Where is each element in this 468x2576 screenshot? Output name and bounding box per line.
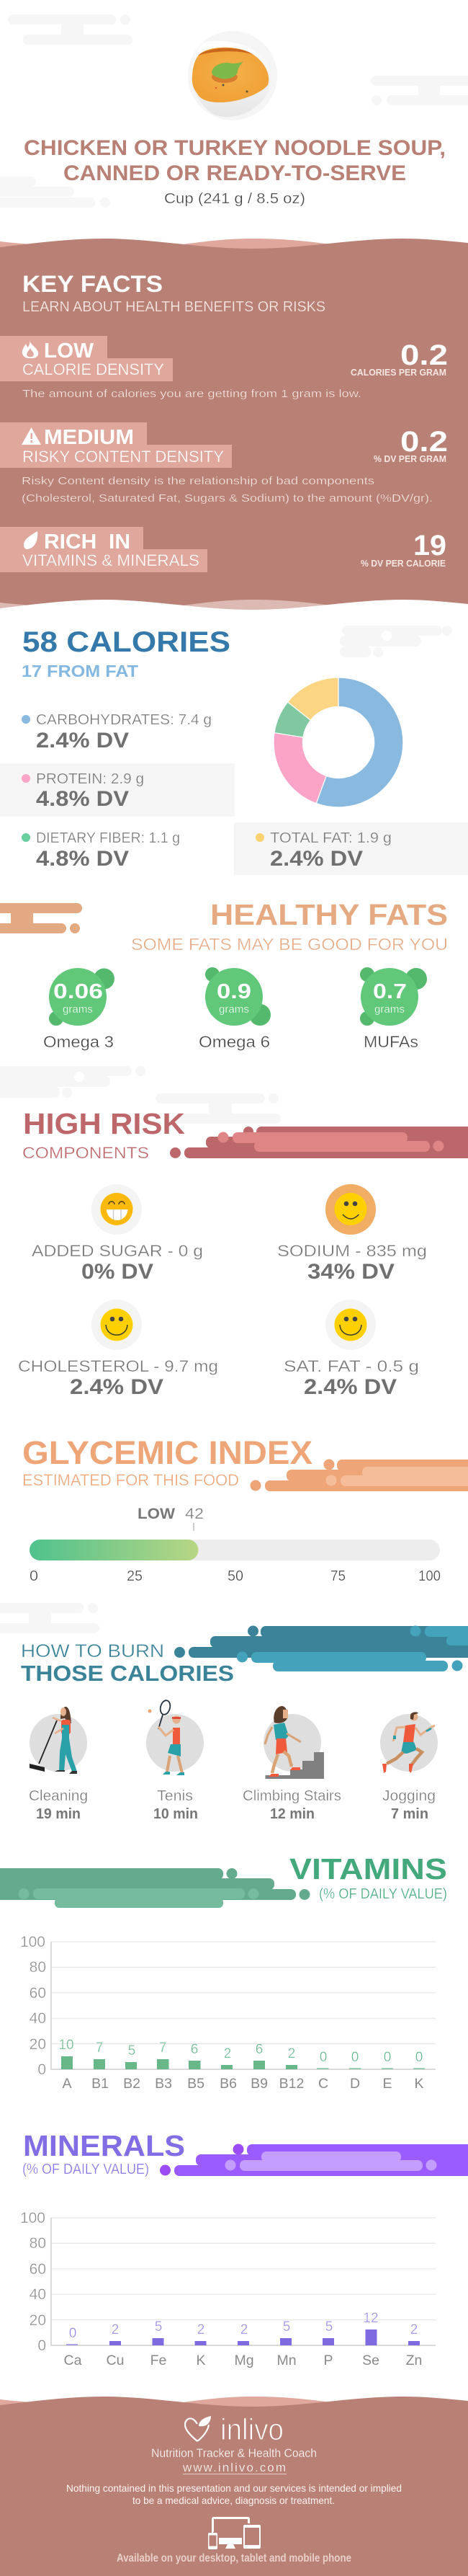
chart: minerals bars: Zn (406, 2353, 422, 2368)
heading: minerals: (% OF DAILY VALUE) (22, 2162, 149, 2177)
chart: glycemic index bar: LOW (138, 1506, 175, 1522)
fact: vitamins and minerals: RICH IN (44, 530, 130, 554)
heading: minerals (22, 2129, 185, 2177)
legend: carbohydrates: 2.4% DV (36, 729, 129, 752)
chart: vitamins bars: 0 (37, 2061, 46, 2078)
chart: minerals bars: Se (362, 2353, 379, 2368)
heading: key facts: LEARN ABOUT HEALTH BENEFITS OR RISKS (22, 299, 325, 315)
item: added sugar: ADDED SUGAR - 0 g (32, 1242, 203, 1260)
item: added sugar (32, 1184, 203, 1284)
heading: minerals: MINERALS (23, 2129, 185, 2162)
chart: vitamins bars: 7 (159, 2040, 166, 2056)
panel: footer (0, 2397, 468, 2576)
chart: vitamins bars: 0 (384, 2050, 391, 2065)
fact: risky content density (0, 422, 448, 505)
item: cholesterol: 2.4% DV (70, 1375, 163, 1399)
legend: protein (22, 771, 144, 811)
fact: vitamins and minerals: 19 (413, 530, 446, 561)
fact: risky content density: MEDIUM (44, 426, 134, 449)
heading: key facts (22, 271, 325, 315)
chart: vitamins bars: 5 (128, 2043, 135, 2058)
title: CHICKEN OR TURKEY NOODLE SOUP, (24, 136, 446, 160)
heading: how to burn: THOSE CALORIES (21, 1661, 234, 1686)
chart: minerals bars: 0 (37, 2337, 46, 2354)
heading: glycemic index (22, 1434, 312, 1489)
chart: vitamins bars: 20 (30, 2036, 46, 2053)
panel: key facts (0, 239, 468, 620)
chart: glycemic index bar: 75 (330, 1568, 346, 1584)
decoration: minerals cloud (160, 2144, 468, 2176)
chart: minerals bars: 2 (240, 2322, 248, 2337)
legend: carbohydrates (22, 712, 212, 752)
chart: vitamins bars: B1 (91, 2076, 109, 2092)
chart: vitamins bars: 10 (58, 2038, 74, 2053)
text: disclaimer: Nothing contained in this presentation and our services is intended or implied (66, 2482, 402, 2494)
heading: vitamins: (% OF DAILY VALUE) (319, 1886, 447, 1902)
logo: inlivo: inlivo (220, 2412, 284, 2446)
heading: high risk (22, 1107, 185, 1162)
item: sodium: 34% DV (307, 1260, 395, 1284)
chart: glycemic index bar: 42 (185, 1506, 204, 1522)
chart: vitamins bars: 0 (415, 2050, 423, 2065)
chart: vitamins bars: E (382, 2076, 392, 2092)
heading: high risk: COMPONENTS (22, 1144, 149, 1162)
legend: protein: 4.8% DV (36, 787, 129, 811)
chart: minerals bars: 12 (363, 2311, 379, 2326)
chart: vitamins bars: 2 (224, 2046, 231, 2061)
background cloud: above high risk left (0, 1066, 145, 1098)
chart: vitamins bars: A (62, 2076, 72, 2092)
icon: devices (208, 2517, 261, 2549)
chart: vitamins bars: 6 (191, 2042, 198, 2057)
chart: vitamins bars: B6 (220, 2076, 237, 2092)
chart: vitamins bars: 100 (20, 1934, 45, 1950)
chart: calorie donut (274, 678, 403, 807)
item: sodium (277, 1184, 427, 1284)
heading: high risk: HIGH RISK (23, 1107, 185, 1140)
text: disclaimer (66, 2482, 402, 2506)
chart: vitamins bars: 7 (96, 2040, 103, 2056)
chart: glycemic index bar: 50 (228, 1568, 243, 1584)
chart: minerals bars (20, 2210, 436, 2368)
heading: healthy fats (131, 898, 448, 954)
chart: vitamins bars: B2 (123, 2076, 140, 2092)
chart: vitamins bars: K (414, 2076, 424, 2092)
item: saturated fat: 2.4% DV (304, 1375, 397, 1399)
panel: protein background (0, 763, 235, 817)
title (24, 136, 446, 185)
icon: soup bowl (188, 31, 277, 120)
fact: vitamins and minerals: % DV PER CALORIE (361, 558, 446, 569)
chart: minerals bars: 60 (30, 2261, 46, 2278)
text: availability: Available on your desktop, tablet and mobile phone (117, 2552, 351, 2564)
chart: minerals bars: 0 (69, 2326, 76, 2341)
text: tagline: Nutrition Tracker & Health Coach (151, 2446, 317, 2460)
legend: dietary fiber: DIETARY FIBER: 1.1 g (36, 830, 180, 846)
decoration: vitamins cloud (0, 1868, 310, 1908)
heading: healthy fats: HEALTHY FATS (210, 898, 448, 931)
item: added sugar: 0% DV (81, 1260, 153, 1284)
chart: glycemic index bar: 100 (418, 1568, 441, 1584)
chart: vitamins bars (20, 1934, 436, 2092)
panel: total fat background (234, 822, 468, 875)
heading: calories (22, 626, 230, 680)
decoration: high risk cloud (170, 1127, 468, 1158)
text: disclaimer: to be a medical advice, diagnosis or treatment. (132, 2495, 335, 2506)
badge: omega 3: grams (63, 1003, 93, 1016)
activity: cleaning (29, 1707, 88, 1822)
fact: calorie density: CALORIES PER GRAM (351, 367, 446, 378)
chart: vitamins bars: 6 (256, 2042, 263, 2057)
chart: minerals bars: 2 (197, 2322, 204, 2337)
chart: glycemic index bar (30, 1506, 441, 1584)
background cloud: title left (0, 177, 110, 208)
activity: tennis: 10 min (153, 1806, 198, 1822)
item: saturated fat (284, 1300, 419, 1399)
badge: mufas (360, 967, 427, 1051)
badge: omega 3: Omega 3 (43, 1033, 114, 1051)
decoration: healthy fats cloud (0, 903, 82, 933)
fact: risky content density: RISKY CONTENT DENSITY (22, 448, 224, 466)
legend: dietary fiber: 4.8% DV (36, 847, 129, 871)
activity: jogging (380, 1712, 438, 1822)
heading: vitamins (289, 1852, 447, 1902)
chart: vitamins bars: D (350, 2076, 360, 2092)
badge: omega 6 (199, 967, 271, 1051)
fact: calorie density (0, 336, 448, 400)
background cloud: calories (340, 626, 452, 657)
activity: cleaning: Cleaning (29, 1788, 88, 1804)
chart: minerals bars: 5 (325, 2319, 333, 2335)
chart: minerals bars: 2 (410, 2322, 418, 2337)
chart: vitamins bars: B3 (155, 2076, 172, 2092)
fact: vitamins and minerals (0, 527, 446, 572)
heading: how to burn: HOW TO BURN (21, 1641, 164, 1661)
item: sodium: SODIUM - 835 mg (277, 1242, 427, 1260)
activity: climbing stairs (243, 1706, 341, 1822)
legend: total fat: 2.4% DV (270, 847, 363, 871)
chart: minerals bars: Cu (107, 2353, 124, 2368)
chart: vitamins bars: 0 (320, 2050, 327, 2065)
background cloud: above high risk right (156, 1093, 281, 1124)
activity: tennis (146, 1700, 204, 1822)
chart: minerals bars: 80 (30, 2235, 46, 2252)
heading: vitamins: VITAMINS (289, 1852, 447, 1886)
fact: calorie density: The amount of calories you are getting from 1 gram is low. (22, 388, 361, 400)
chart: glycemic index bar: 25 (127, 1568, 143, 1584)
background cloud: above burn (0, 1603, 99, 1633)
chart: vitamins bars: 2 (288, 2046, 295, 2061)
chart: minerals bars: 100 (20, 2210, 45, 2226)
legend: total fat (256, 830, 392, 871)
badge: omega 3: 0.06 (53, 980, 103, 1003)
decoration: burn cloud (174, 1626, 468, 1671)
fact: calorie density: 0.2 (400, 339, 448, 371)
chart: minerals bars: Ca (64, 2353, 82, 2368)
fact: risky content density: (Cholesterol, Saturated Fat, Sugars & Sodium) to the amount (%DV/gr). (22, 492, 433, 505)
background cloud: top left (8, 14, 132, 45)
link: website: www.inlivo.com (182, 2461, 286, 2474)
chart: minerals bars: 40 (30, 2286, 46, 2303)
logo: inlivo (185, 2412, 284, 2446)
activity: climbing stairs: 12 min (270, 1806, 315, 1822)
badge: mufas: 0.7 (373, 980, 407, 1003)
chart: glycemic index bar: 0 (30, 1568, 38, 1584)
fact: calorie density: LOW (44, 339, 94, 363)
chart: vitamins bars: C (318, 2076, 328, 2092)
activity: cleaning: 19 min (36, 1806, 81, 1822)
heading: calories: 17 FROM FAT (22, 662, 138, 680)
legend: protein: PROTEIN: 2.9 g (36, 771, 144, 787)
activity: jogging: Jogging (382, 1788, 436, 1804)
legend: total fat: TOTAL FAT: 1.9 g (270, 830, 392, 846)
chart: vitamins bars: 40 (30, 2010, 46, 2027)
serving size: Cup (241 g / 8.5 oz) (164, 191, 305, 207)
item: cholesterol: CHOLESTEROL - 9.7 mg (18, 1357, 218, 1375)
badge: omega 6: 0.9 (217, 980, 251, 1003)
chart: minerals bars: 5 (283, 2319, 290, 2335)
fact: risky content density: % DV PER GRAM (374, 453, 446, 464)
chart: vitamins bars: B12 (279, 2076, 304, 2092)
heading: key facts: KEY FACTS (22, 271, 163, 297)
heading: glycemic index: GLYCEMIC INDEX (22, 1434, 312, 1471)
chart: minerals bars: Mg (234, 2353, 254, 2368)
background cloud: top right (371, 76, 468, 105)
heading: healthy fats: SOME FATS MAY BE GOOD FOR YOU (131, 935, 448, 954)
heading: how to burn (21, 1641, 234, 1686)
chart: vitamins bars: 0 (351, 2050, 359, 2065)
fact: risky content density: 0.2 (400, 426, 448, 458)
title: CANNED OR READY-TO-SERVE (63, 161, 406, 185)
chart: vitamins bars: 60 (30, 1985, 46, 2002)
chart: minerals bars: K (196, 2353, 206, 2368)
chart: minerals bars: Mn (276, 2353, 297, 2368)
badge: omega 6: Omega 6 (199, 1033, 270, 1051)
item: cholesterol (18, 1300, 218, 1399)
chart: minerals bars: 20 (30, 2312, 46, 2329)
activity: tennis: Tenis (157, 1788, 193, 1804)
badge: mufas: MUFAs (364, 1033, 418, 1051)
fact: calorie density: CALORIE DENSITY (22, 360, 164, 378)
activity: jogging: 7 min (391, 1806, 428, 1822)
heading: glycemic index: ESTIMATED FOR THIS FOOD (22, 1471, 239, 1489)
chart: vitamins bars: 80 (30, 1959, 46, 1976)
fact: vitamins and minerals: VITAMINS & MINERALS (22, 551, 199, 569)
legend: carbohydrates: CARBOHYDRATES: 7.4 g (36, 712, 212, 728)
chart: vitamins bars: B5 (187, 2076, 204, 2092)
chart: minerals bars: P (323, 2353, 333, 2368)
decoration: glycemic cloud (251, 1459, 468, 1491)
item: saturated fat: SAT. FAT - 0.5 g (284, 1357, 419, 1375)
fact: risky content density: Risky Content density is the relationship of bad components (22, 475, 374, 487)
legend: dietary fiber (22, 830, 180, 871)
badge: omega 3 (43, 968, 114, 1051)
chart: vitamins bars: B9 (251, 2076, 268, 2092)
chart: minerals bars: Fe (150, 2353, 166, 2368)
heading: calories: 58 CALORIES (22, 626, 230, 658)
badge: omega 6: grams (219, 1003, 249, 1016)
badge: mufas: grams (374, 1003, 405, 1016)
activity: climbing stairs: Climbing Stairs (243, 1788, 341, 1804)
chart: minerals bars: 2 (112, 2322, 119, 2337)
chart: minerals bars: 5 (155, 2319, 162, 2335)
